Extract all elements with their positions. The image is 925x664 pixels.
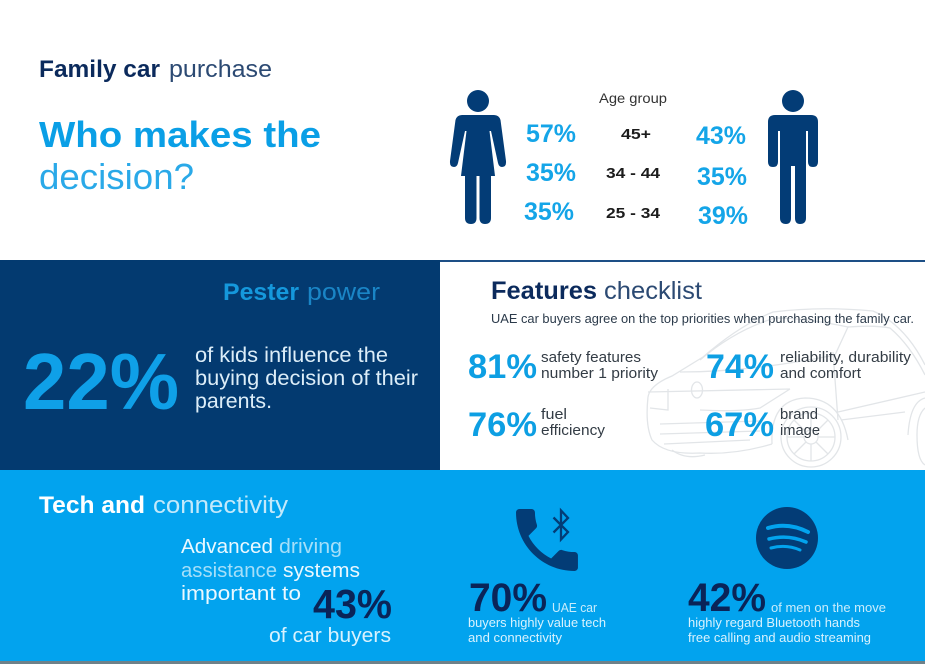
icon: woman figure: [450, 90, 506, 224]
men percentages: 39%: [698, 202, 748, 230]
text: advanced driving assistance: assistance: [181, 560, 277, 582]
panel: tech and connectivity: [0, 470, 925, 664]
stat: 70 percent: buyers highly value tech: [468, 616, 606, 630]
stat: 67 percent brand: image: [780, 422, 820, 439]
stat: 43 percent: 43%: [313, 581, 392, 627]
stat: 22 percent: 22%: [23, 337, 179, 426]
women percentages: [524, 120, 576, 226]
stat: 70 percent: UAE car: [552, 601, 597, 615]
stat: 81 percent safety: 81%: [468, 348, 537, 386]
stat: 76 percent fuel: 76%: [468, 406, 537, 444]
text: kids influence: buying decision of their: [195, 367, 418, 390]
stat: 42 percent: of men on the move: [771, 601, 886, 615]
icon: spotify: [756, 507, 818, 569]
age group labels: 45+: [621, 126, 651, 143]
women percentages: 57%: [526, 120, 576, 148]
text: advanced driving assistance: driving: [279, 536, 342, 558]
icon: man figure: [768, 90, 818, 224]
illustration: car outline: [647, 309, 925, 467]
stat: 42 percent: 42%: [688, 576, 766, 620]
men percentages: 35%: [697, 163, 747, 191]
stat: 70 percent: [468, 576, 606, 645]
men percentages: [696, 122, 748, 230]
text: advanced driving assistance: Advanced: [181, 536, 273, 558]
heading: tech and connectivity: Tech and: [39, 492, 145, 519]
panel: age group comparison: [450, 90, 818, 230]
text: advanced driving assistance: important to: [181, 583, 301, 605]
stat: 70 percent: and connectivity: [468, 631, 563, 645]
women percentages: 35%: [526, 159, 576, 187]
text: advanced driving assistance: systems: [283, 560, 360, 582]
stat: 74 percent reliability: [706, 348, 912, 386]
stat: 67 percent brand: brand: [780, 406, 818, 423]
panel: features checklist: [440, 260, 925, 470]
text: advanced driving assistance: [181, 536, 391, 647]
heading: features checklist: checklist: [604, 277, 702, 305]
panel: header: [39, 56, 321, 197]
heading: who makes the decision: [39, 114, 321, 197]
stat: 81 percent safety: [468, 348, 659, 386]
women percentages: 35%: [524, 198, 574, 226]
text: kids influence: [195, 344, 418, 413]
panel: pester power: [0, 260, 440, 470]
text: kids influence: parents.: [195, 390, 272, 413]
heading: tech and connectivity: [39, 492, 288, 519]
text: kids influence: of kids influence the: [195, 344, 388, 367]
stat: 42 percent: [688, 576, 886, 645]
heading: features checklist: Features: [491, 277, 597, 305]
men percentages: 43%: [696, 122, 746, 150]
heading: tech and connectivity: connectivity: [153, 492, 288, 519]
text: checklist intro: UAE car buyers agree on the top priorities when purchasing the family car.: [491, 311, 914, 326]
title: family car purchase: [39, 56, 272, 83]
stat: 81 percent safety: safety features: [541, 349, 641, 366]
stat: 74 percent reliability: and comfort: [780, 365, 862, 382]
stat: 76 percent fuel: fuel: [541, 406, 567, 423]
age group labels: [606, 126, 661, 222]
heading: features checklist: [491, 277, 702, 305]
title: family car purchase: purchase: [169, 56, 272, 83]
label: age group: Age group: [599, 90, 667, 106]
stat: 81 percent safety: number 1 priority: [541, 365, 659, 382]
heading: who makes the decision: decision?: [39, 156, 194, 197]
stat: 42 percent: free calling and audio streaming: [688, 631, 871, 645]
heading: pester power: power: [307, 279, 380, 306]
heading: who makes the decision: Who makes the: [39, 114, 321, 155]
title: family car purchase: Family car: [39, 56, 160, 83]
icon: bluetooth phone: [516, 509, 578, 571]
stat: 67 percent brand: [705, 406, 820, 444]
stat: 74 percent reliability: 74%: [706, 348, 774, 386]
age group labels: 34 - 44: [606, 165, 661, 182]
heading: pester power: Pester: [223, 279, 299, 306]
stat: 74 percent reliability: reliability, durability: [780, 349, 912, 366]
age group labels: 25 - 34: [606, 205, 661, 222]
stat: 42 percent: highly regard Bluetooth hands: [688, 616, 860, 630]
text: advanced driving assistance: of car buyers: [269, 625, 391, 647]
stat: 70 percent: 70%: [469, 576, 547, 620]
stat: 76 percent fuel: efficiency: [541, 422, 606, 439]
stat: 76 percent fuel: [468, 406, 606, 444]
stat: 67 percent brand: 67%: [705, 406, 774, 444]
heading: pester power: [223, 279, 380, 306]
